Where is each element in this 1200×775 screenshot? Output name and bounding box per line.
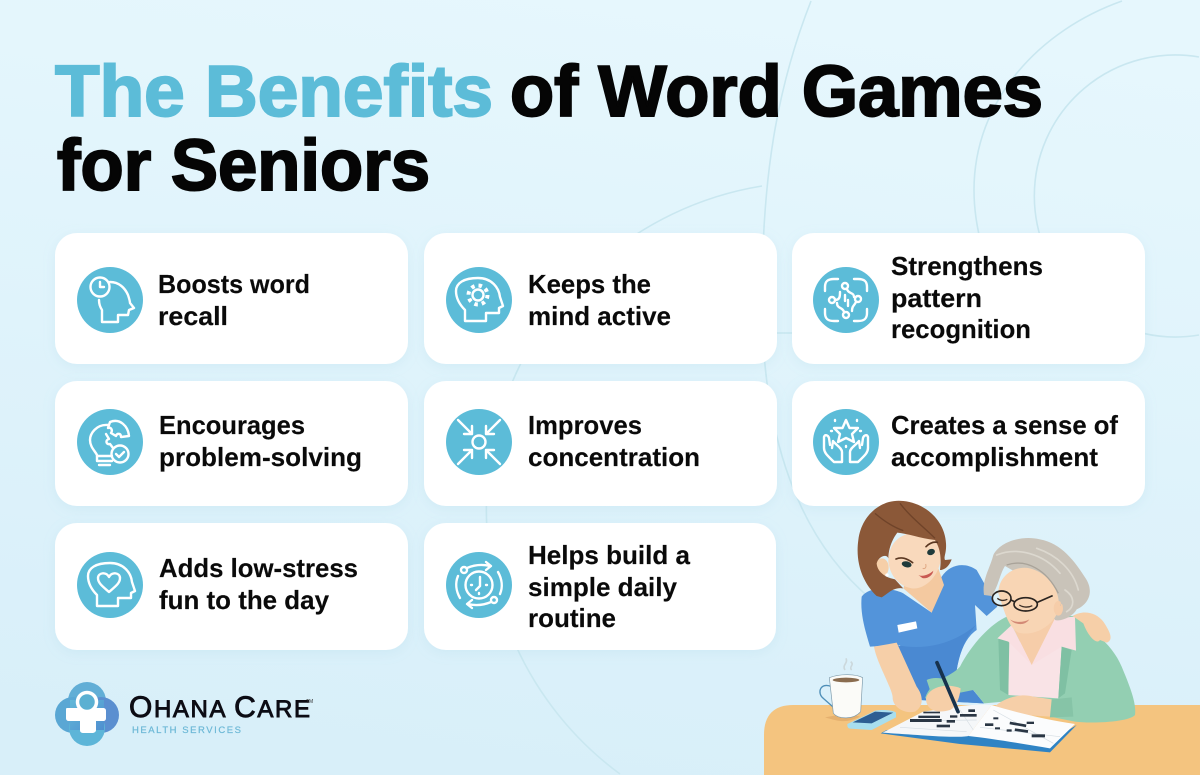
panel: adds low-stress fun	[55, 523, 408, 650]
text: problem-solving	[159, 442, 362, 472]
crossword book	[881, 704, 1077, 752]
title: of Word Games	[510, 52, 1043, 132]
text: Boosts word	[158, 269, 310, 299]
icon: logo mark	[55, 682, 119, 746]
icon: clock with cycle arrows	[446, 552, 512, 618]
text: Creates a sense of	[891, 410, 1118, 440]
text	[528, 269, 671, 331]
text: Health Services: HEALTH SERVICES	[132, 725, 241, 736]
icon: head with clock	[77, 267, 143, 333]
logo: Ohana Care Health Services	[55, 682, 313, 746]
icon: bulb with puzzle and check	[77, 409, 143, 475]
text: Encourages	[159, 410, 305, 440]
title: for Seniors	[57, 126, 430, 206]
text: concentration	[528, 442, 700, 472]
text: accomplishment	[891, 442, 1098, 472]
text: Keeps the	[528, 269, 651, 299]
text: Helps build a	[528, 540, 691, 570]
text: Strengthens	[891, 251, 1043, 281]
panel: encourages problem-solving	[55, 381, 408, 506]
panel: creates a sense of accomplishment	[792, 381, 1145, 506]
text	[159, 553, 358, 615]
text: pattern	[891, 283, 982, 313]
text: Ohana Care: OHANA CARE	[129, 691, 310, 724]
mug	[820, 658, 863, 721]
text	[528, 540, 691, 633]
text: trademark: TM	[306, 699, 313, 705]
text: fun to the day	[159, 585, 330, 615]
icon: head with gear	[446, 267, 512, 333]
text	[891, 251, 1043, 344]
caregiver hand on shoulder	[1073, 612, 1111, 643]
text	[528, 410, 700, 472]
title: The Benefits	[55, 52, 493, 132]
writing hand and pen	[926, 663, 961, 712]
text: recognition	[891, 314, 1031, 344]
table	[764, 705, 1200, 775]
phone	[847, 710, 896, 730]
text: Improves	[528, 410, 642, 440]
icon: hands with star	[813, 409, 879, 475]
text: recall	[158, 301, 228, 331]
panel: boosts word recall	[55, 233, 408, 364]
panel: improves concentration	[424, 381, 777, 506]
caregiver	[858, 501, 997, 712]
icon: head with heart	[77, 552, 143, 618]
text: routine	[528, 603, 616, 633]
icon: arrows converging	[446, 409, 512, 475]
icon: pattern nodes	[813, 267, 879, 333]
panel: helps build a simple daily routine	[424, 523, 776, 650]
illustration: caregiver and senior doing crossword	[764, 501, 1200, 775]
text	[891, 410, 1118, 472]
text: Adds low-stress	[159, 553, 358, 583]
panel: strengthens pattern recognition	[792, 233, 1145, 364]
text: mind active	[528, 301, 671, 331]
text	[158, 269, 310, 331]
senior woman	[925, 538, 1135, 723]
title	[55, 52, 1043, 206]
panel: keeps the mind active	[424, 233, 777, 364]
text: simple daily	[528, 572, 678, 602]
text	[159, 410, 362, 472]
